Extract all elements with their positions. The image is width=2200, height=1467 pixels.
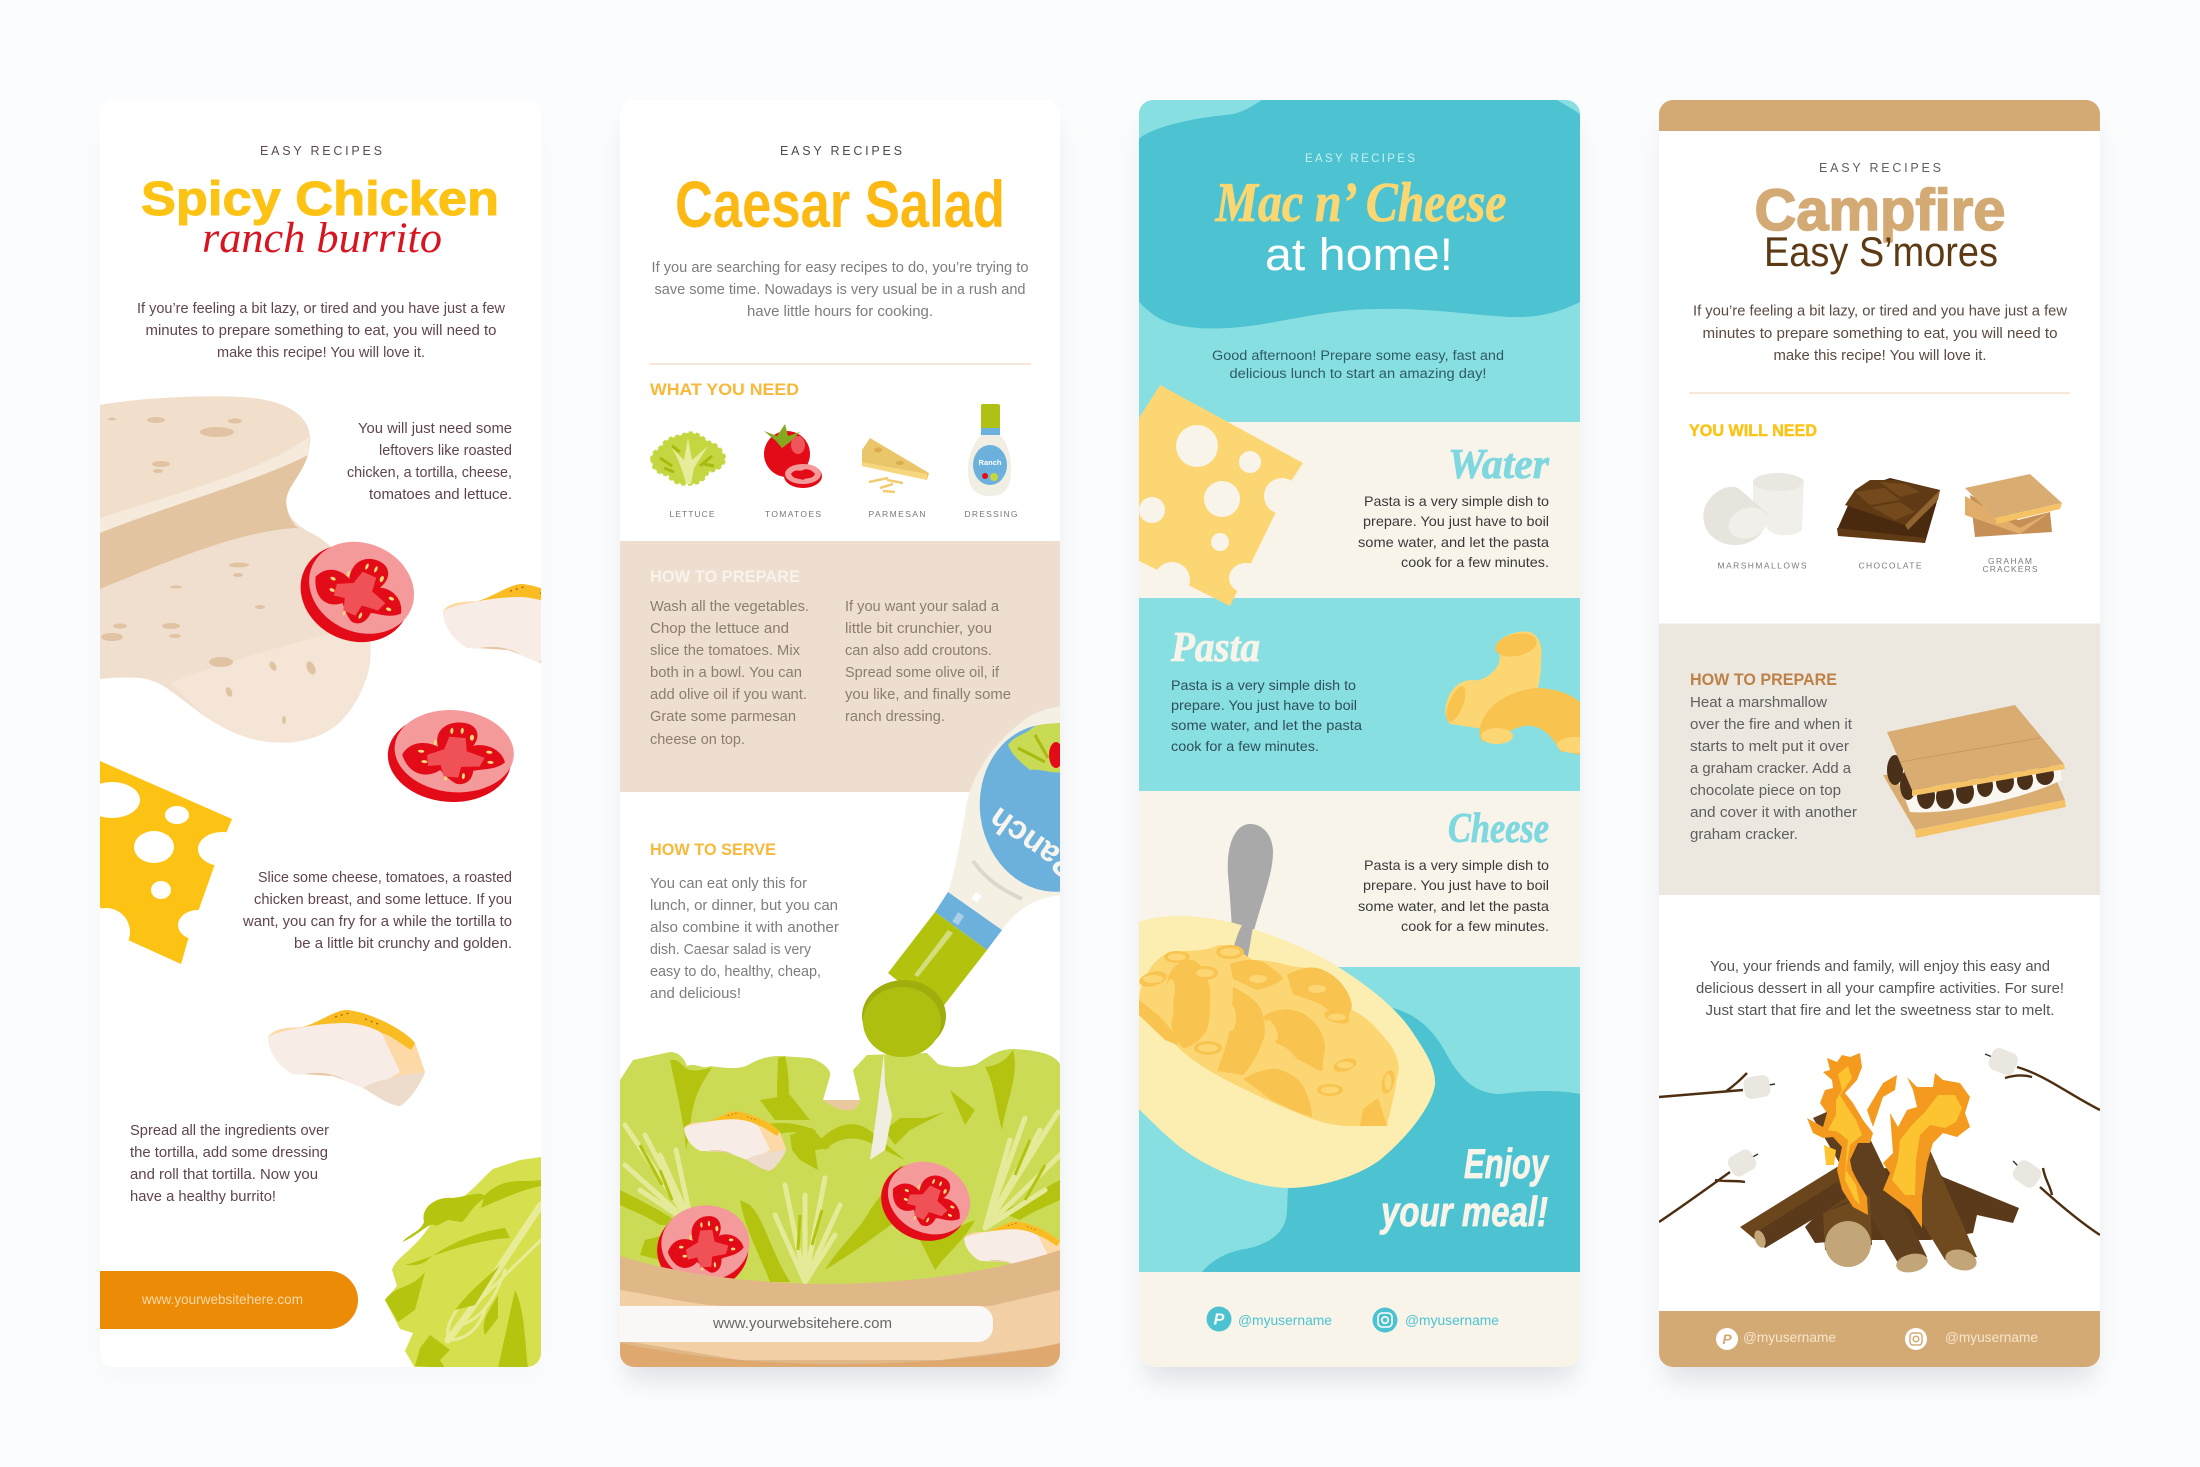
text: slice some cheese: Slice some cheese, tomatoes, a roasted <box>258 870 512 886</box>
text: cheese: Pasta is a very simple dish to <box>1364 857 1549 873</box>
right column text: If you want your salad a <box>845 599 1000 615</box>
ingredient: marshmallows <box>1703 473 1807 570</box>
panel shadows <box>108 128 2092 1378</box>
header wave <box>1139 100 1580 329</box>
social: instagram: @myusername <box>1405 1312 1499 1328</box>
band: pasta teal <box>1139 598 1580 791</box>
social: pinterest: P <box>1722 1331 1732 1347</box>
icon: tomato slice in salad upper <box>868 1147 982 1255</box>
intro text: save some time. Nowadays is very usual be in a rush and <box>654 282 1026 298</box>
callout: enjoy your meal <box>1379 1140 1550 1235</box>
text: how to prepare: Heat a marshmallow <box>1690 695 1828 711</box>
intro text: minutes to prepare something to eat, you will need to <box>1702 326 2058 342</box>
eyebrow: easy recipes: EASY RECIPES <box>780 144 902 158</box>
text: how to serve: easy to do, healthy, cheap, <box>650 964 821 980</box>
illustration: dressing bottle <box>862 706 1135 1057</box>
illustration: bowl <box>1138 915 1435 1188</box>
title: spicy chicken: Spicy Chicken <box>141 173 499 226</box>
heading: what you need: WHAT YOU NEED <box>650 381 799 399</box>
intro text: make this recipe! You will love it. <box>217 345 425 361</box>
ingredient: graham crackers: GRAHAM <box>1988 556 2032 566</box>
icon: chicken piece center <box>268 1010 425 1106</box>
footer band <box>1659 1311 2100 1367</box>
ingredient: parmesan: PARMESAN <box>868 509 926 519</box>
text: you will just need: leftovers like roasted <box>379 443 512 459</box>
icon: chicken in salad <box>684 1111 786 1171</box>
left column text: Grate some parmesan <box>650 709 796 725</box>
text: how to serve: dish. Caesar salad is very <box>650 942 812 958</box>
text: you will just need <box>347 421 512 503</box>
text: water: Pasta is a very simple dish to <box>1364 493 1549 509</box>
callout: enjoy your meal: your meal! <box>1379 1188 1548 1235</box>
left column text <box>650 599 809 748</box>
icon: tomato slice upper <box>300 542 414 642</box>
text: how to serve: also combine it with another <box>650 920 839 936</box>
ingredient: lettuce: LETTUCE <box>670 509 715 519</box>
eyebrow: easy recipes: EASY RECIPES <box>260 144 382 158</box>
illustration: lettuce salad <box>620 1049 1060 1290</box>
heading: water: Water <box>1448 442 1550 488</box>
left column text: cheese on top. <box>650 732 745 748</box>
ingredient: tomatoes <box>764 424 822 519</box>
ingredient: parmesan <box>862 438 929 519</box>
text: pasta <box>1171 677 1362 754</box>
closing text: Just start that fire and let the sweetness star to melt. <box>1706 1003 2054 1019</box>
text: how to serve: lunch, or dinner, but you can <box>650 898 838 914</box>
website button: www.yourwebsitehere.com <box>141 1292 303 1307</box>
icon: tomato slice in salad lower <box>655 1203 752 1292</box>
macaroni filling <box>1138 945 1399 1126</box>
callout: enjoy your meal: Enjoy <box>1464 1140 1550 1187</box>
heading: how to prepare: HOW TO PREPARE <box>1690 671 1837 689</box>
text: how to prepare: graham cracker. <box>1690 827 1798 843</box>
text: how to prepare <box>1690 695 1857 843</box>
text: spread all the ingredients: have a healthy burrito! <box>130 1189 276 1205</box>
text: spread all the ingredients <box>130 1123 329 1205</box>
icon: chicken in salad right <box>964 1221 1066 1281</box>
ingredient: lettuce <box>652 433 725 519</box>
closing text <box>1696 959 2064 1019</box>
website pill <box>600 1306 993 1342</box>
social: instagram: @myusername <box>1945 1329 2038 1345</box>
illustration: tortilla <box>100 396 370 743</box>
band: enjoy teal <box>1139 967 1580 1272</box>
text: how to prepare: over the fire and when it <box>1690 717 1852 733</box>
right column text: can also add croutons. <box>845 643 992 659</box>
intro text <box>137 301 506 361</box>
intro text <box>652 260 1028 320</box>
icon: tomato slice lower <box>388 710 514 802</box>
panel: mac n cheese <box>1138 100 1593 1367</box>
eyebrow: easy recipes: EASY RECIPES <box>1819 161 1941 175</box>
left column text: both in a bowl. You can <box>650 665 802 681</box>
ingredient: graham crackers: CRACKERS <box>1982 564 2038 574</box>
ingredient: marshmallows: MARSHMALLOWS <box>1718 560 1807 570</box>
website button <box>100 1271 358 1329</box>
social: pinterest: @myusername <box>1238 1312 1332 1328</box>
text: cheese: prepare. You just have to boil <box>1363 877 1549 893</box>
intro text: If you are searching for easy recipes to do, you’re trying to <box>652 260 1028 276</box>
closing text: delicious dessert in all your campfire activities. For sure! <box>1696 981 2064 997</box>
right column text: Spread some olive oil, if <box>845 665 1000 681</box>
illustration: bowl and website pill <box>600 1250 1060 1367</box>
icon: spoon <box>1228 824 1273 962</box>
intro text: have little hours for cooking. <box>747 304 933 320</box>
ingredient: tomatoes: TOMATOES <box>765 509 821 519</box>
social: instagram <box>1905 1328 2038 1350</box>
left column text: slice the tomatoes. Mix <box>650 643 801 659</box>
intro text: delicious lunch to start an amazing day! <box>1230 366 1486 381</box>
illustration: smore <box>1883 705 2066 838</box>
icon: chicken piece right <box>443 584 541 664</box>
website text: www.yourwebsitehere.com <box>712 1315 892 1332</box>
band: how to prepare <box>1659 624 2100 895</box>
title: mac n cheese: Mac n’ Cheese <box>1215 172 1506 234</box>
text: how to serve: You can eat only this for <box>650 876 807 892</box>
ingredient: dressing: Ranch <box>979 458 1002 467</box>
text: how to serve: and delicious! <box>650 986 741 1002</box>
intro text: Good afternoon! Prepare some easy, fast and <box>1212 348 1504 363</box>
ingredient: chocolate <box>1837 478 1940 570</box>
illustration: lettuce leaf <box>385 1157 541 1368</box>
intro text: If you’re feeling a bit lazy, or tired and you have just a few <box>137 301 506 317</box>
text: how to prepare: chocolate piece on top <box>1690 783 1841 799</box>
text: slice some cheese: want, you can fry for a while the tortilla to <box>242 914 512 930</box>
text: how to serve <box>650 876 839 1002</box>
text: pasta: some water, and let the pasta <box>1171 717 1362 733</box>
text: you will just need: tomatoes and lettuce. <box>369 487 512 503</box>
text: spread all the ingredients: Spread all the ingredients over <box>130 1123 329 1139</box>
text: you will just need: chicken, a tortilla, cheese, <box>347 465 512 481</box>
text: spread all the ingredients: the tortilla, add some dressing <box>130 1145 328 1161</box>
icon: cheese wedge <box>1139 385 1303 606</box>
right column text: ranch dressing. <box>845 709 945 725</box>
illustration: roasting sticks and marshmallows <box>1659 1046 2100 1235</box>
text: slice some cheese: chicken breast, and some lettuce. If you <box>254 892 512 908</box>
wave: enjoy dark teal <box>1202 1008 1580 1272</box>
text: slice some cheese: be a little bit crunchy and golden. <box>294 936 512 952</box>
text: pasta: Pasta is a very simple dish to <box>1171 677 1356 693</box>
ingredient: chocolate: CHOCOLATE <box>1858 560 1922 570</box>
right column text: little bit crunchier, you <box>845 621 992 637</box>
text: water <box>1358 493 1549 570</box>
left column text: Wash all the vegetables. <box>650 599 809 615</box>
social: instagram <box>1372 1308 1499 1332</box>
text: pasta: cook for a few minutes. <box>1171 738 1319 754</box>
text: how to prepare: a graham cracker. Add a <box>1690 761 1852 777</box>
band: how to prepare <box>620 541 1060 792</box>
heading: cheese: Cheese <box>1448 806 1549 852</box>
intro text <box>1212 348 1504 381</box>
icon: cheese wedge <box>100 761 232 964</box>
text: cheese <box>1358 857 1549 934</box>
heading: how to serve: HOW TO SERVE <box>650 841 776 859</box>
subtitle: ranch burrito: ranch burrito <box>202 215 442 262</box>
text: pasta: prepare. You just have to boil <box>1171 697 1357 713</box>
heading: how to prepare: HOW TO PREPARE <box>650 568 800 586</box>
left column text: Chop the lettuce and <box>650 621 789 637</box>
intro text: If you’re feeling a bit lazy, or tired and you have just a few <box>1693 304 2068 320</box>
heading: you will need: YOU WILL NEED <box>1689 422 1817 440</box>
infographic canvas <box>100 100 2100 1386</box>
social: pinterest <box>1206 1306 1332 1332</box>
icon: macaroni <box>1442 630 1593 755</box>
closing text: You, your friends and family, will enjoy this easy and <box>1710 959 2050 975</box>
spoon shaft over bowl <box>1233 915 1255 962</box>
intro text: minutes to prepare something to eat, you will need to <box>146 323 496 339</box>
text: water: cook for a few minutes. <box>1401 554 1549 570</box>
ingredient: dressing: DRESSING <box>964 509 1018 519</box>
intro text: make this recipe! You will love it. <box>1774 348 1986 364</box>
social: pinterest <box>1716 1328 1836 1350</box>
subtitle: at home: at home! <box>1265 229 1453 280</box>
right column text <box>845 599 1011 725</box>
subtitle: easy smores: Easy S’mores <box>1764 228 1998 275</box>
title: campfire: Campfire <box>1754 178 2006 243</box>
text: water: prepare. You just have to boil <box>1363 513 1549 529</box>
illustration: salad bowl back <box>815 1100 866 1116</box>
text: you will just need: You will just need some <box>358 421 512 437</box>
text: cheese: cook for a few minutes. <box>1401 918 1549 934</box>
left column text: add olive oil if you want. <box>650 687 807 703</box>
illustration: campfire logs <box>1740 1106 2019 1275</box>
intro text <box>1693 304 2068 364</box>
illustration: flames <box>1807 1053 1970 1228</box>
text: spread all the ingredients: and roll that tortilla. Now you <box>130 1167 318 1183</box>
panel: campfire smores <box>1659 100 2100 1367</box>
title: caesar salad: Caesar Salad <box>675 167 1005 241</box>
panel: spicy chicken ranch burrito <box>100 126 541 1367</box>
illustration: dressing bottle: Ranch <box>981 800 1085 888</box>
text: how to prepare: starts to melt put it over <box>1690 739 1849 755</box>
heading: pasta: Pasta <box>1170 625 1260 671</box>
ingredient: graham crackers <box>1965 474 2062 574</box>
text: cheese: some water, and let the pasta <box>1358 898 1549 914</box>
right column text: you like, and finally some <box>845 687 1011 703</box>
panel: caesar salad <box>620 114 1060 1367</box>
text: water: some water, and let the pasta <box>1358 534 1549 550</box>
social: pinterest: @myusername <box>1743 1329 1836 1345</box>
text: slice some cheese <box>242 870 512 952</box>
ingredient: dressing <box>964 404 1018 519</box>
eyebrow: easy recipes: EASY RECIPES <box>1305 153 1415 165</box>
text: how to prepare: and cover it with another <box>1690 805 1857 821</box>
